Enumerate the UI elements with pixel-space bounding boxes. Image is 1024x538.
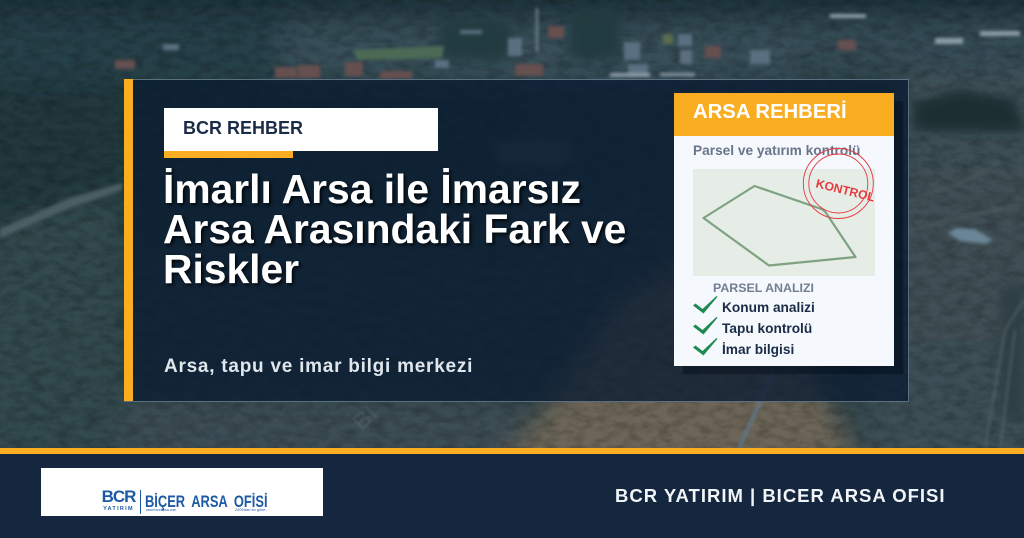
road on the left: [0, 183, 122, 238]
card subtitle: Parsel ve yatırım kontrolü: [693, 143, 860, 158]
field tracks: [908, 162, 1024, 232]
title: [163, 166, 628, 292]
checklist item: Tapu kontrolü: [693, 317, 812, 336]
panel: Arsa Rehberi card: [674, 93, 894, 366]
subtitle: Arsa, tapu ve imar bilgi merkezi: [164, 356, 473, 377]
logo divider: [140, 490, 141, 514]
footer bar: [0, 448, 1024, 538]
footer brand text: BCR YATIRIM | BICER ARSA OFISI: [615, 485, 946, 506]
parcel outline: [704, 186, 856, 266]
stamp: KONTROL: KONTROL: [814, 176, 877, 205]
vehicles: [948, 228, 993, 244]
minaret: [536, 8, 538, 52]
parcel analysis heading: PARSEL ANALIZI: [713, 280, 814, 294]
card header: [674, 93, 894, 136]
stamp: KONTROL: [803, 148, 877, 218]
icon: check: [693, 317, 718, 334]
logo YATIRIM: YATIRIM: [103, 506, 134, 512]
item text: İmar bilgisi: [722, 342, 794, 357]
tag text: BCR REHBER: [183, 118, 303, 138]
logo slogan: 2009'dan bu güne...: [235, 508, 268, 512]
title: Arsa Arasındaki Fark ve: [163, 206, 626, 252]
map background: [693, 169, 875, 276]
village houses: [163, 30, 770, 73]
checklist item: İmar bilgisi: [693, 338, 794, 357]
watermark: BI: [347, 400, 383, 436]
icon: check: [693, 296, 718, 314]
label: BCR REHBER tag: [164, 108, 438, 151]
logo BCR: BCR: [102, 487, 135, 506]
logo box: [41, 468, 323, 516]
logo web address: www.bicerarsa.com: [146, 508, 176, 512]
icon: check: [693, 338, 718, 356]
title: İmarlı Arsa ile İmarsız: [163, 166, 581, 212]
accent: orange underline of tag: [164, 151, 293, 158]
card heading: ARSA REHBERİ: [693, 101, 847, 123]
checklist item: Konum analizi: [693, 296, 815, 315]
title: Riskler: [163, 246, 299, 292]
item text: Konum analizi: [722, 300, 815, 315]
item text: Tapu kontrolü: [722, 321, 812, 336]
logo: BCR Yatırım: [102, 487, 136, 512]
hillside shadows and bushes: [440, 10, 1024, 420]
accent bar: left orange edge of the card: [124, 79, 133, 401]
logo: Biçer Arsa Ofisi: BİÇER ARSA OFİSİ: [145, 492, 268, 510]
green field: [353, 46, 444, 60]
panel: main dark card: [124, 79, 909, 402]
pale pipe trench: [739, 330, 790, 448]
parcel map with stamp: [693, 148, 877, 276]
footer orange rule: [0, 448, 1024, 454]
